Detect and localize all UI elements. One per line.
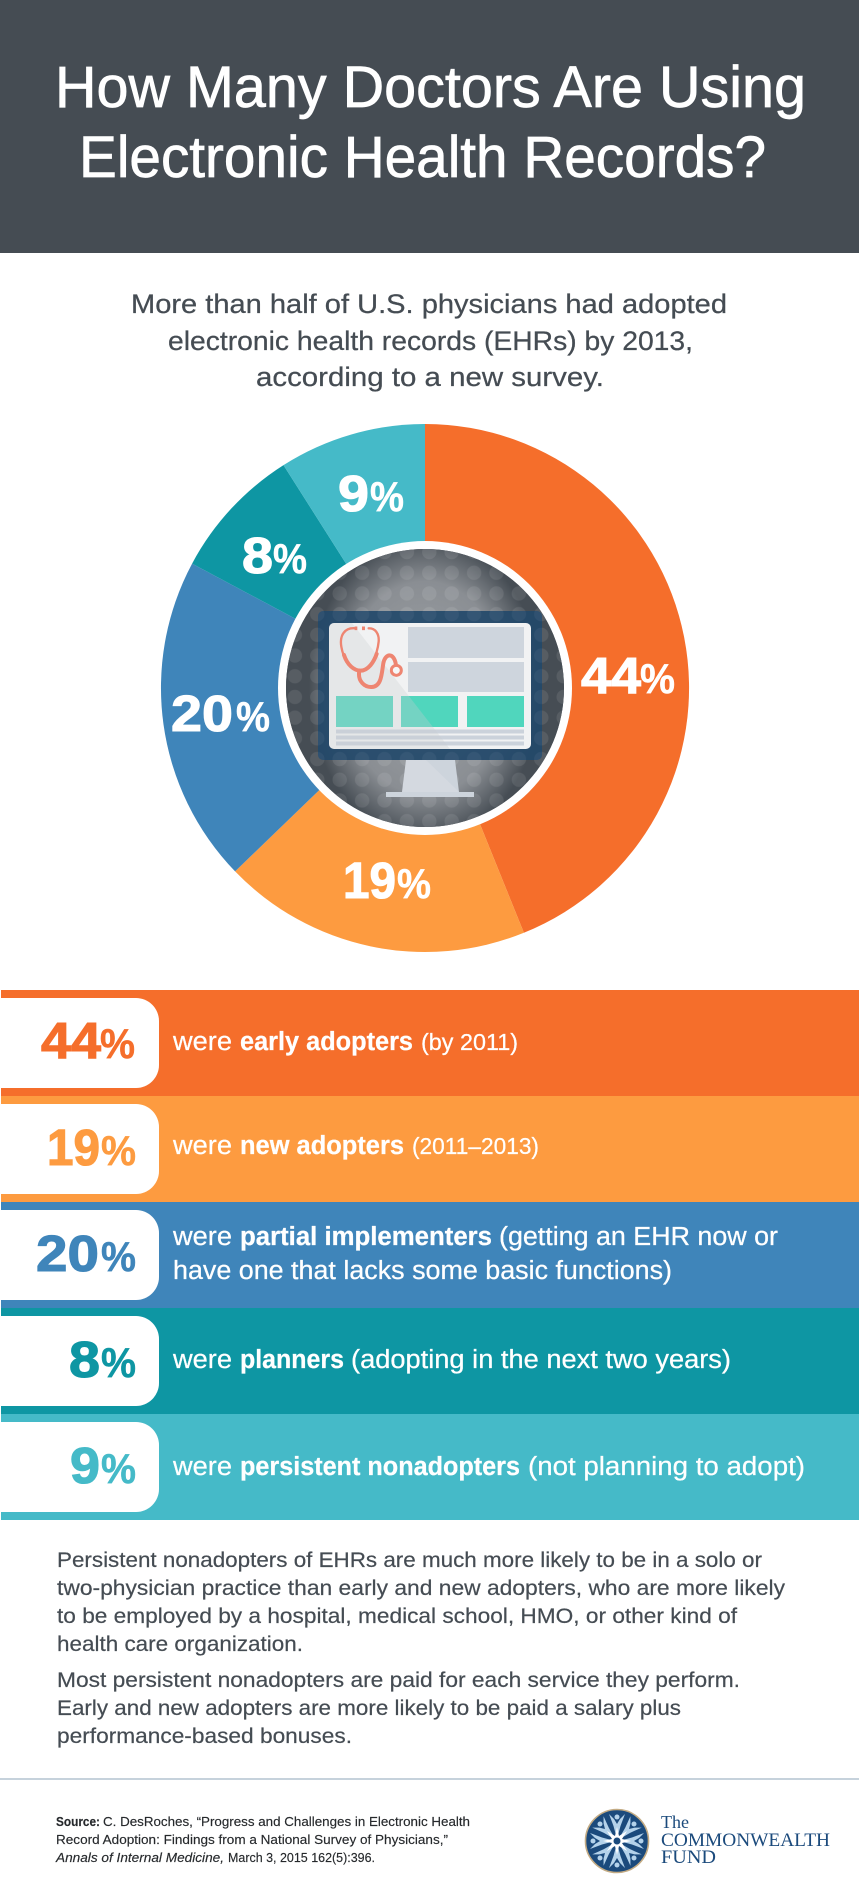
row: new adopters — [0, 1096, 859, 1202]
title — [55, 55, 806, 190]
text block: payment: Most persistent nonadopters are paid for each service they perform. — [57, 1668, 740, 1692]
row: new adopters: % — [101, 1127, 136, 1174]
slice: partial implementers 20% — [161, 564, 425, 871]
row: planners: 8 — [69, 1331, 100, 1388]
row: new adopters: were — [172, 1132, 232, 1160]
label 20% — [171, 685, 270, 742]
logo wordmark: COMMONWEALTH — [661, 1830, 830, 1851]
label 20%: % — [236, 693, 270, 740]
header banner — [0, 0, 859, 253]
row: persistent nonadopters: 9 — [70, 1437, 100, 1494]
row: partial implementers: partial implementers — [240, 1223, 492, 1251]
label 8% — [242, 527, 307, 584]
row: early adopters: % — [100, 1020, 135, 1067]
row: partial implementers: (getting an EHR now or — [499, 1223, 779, 1251]
subtitle: according to a new survey. — [256, 362, 604, 392]
subtitle — [131, 289, 727, 392]
text block: practice setting: to be employed by a hospital, medical school, HMO, or other kind of — [57, 1604, 737, 1628]
row: persistent nonadopters: persistent nonadopters — [240, 1453, 520, 1481]
text block: payment — [57, 1668, 740, 1748]
label 19% — [343, 852, 431, 909]
label 9%: % — [370, 473, 404, 520]
title: How Many Doctors Are Using — [55, 55, 806, 120]
icon: computer monitor with stethoscope — [278, 541, 572, 835]
row: persistent nonadopters: (not planning to adopt) — [528, 1453, 805, 1481]
label 44%: 44 — [581, 647, 642, 704]
title: Electronic Health Records? — [79, 125, 766, 190]
subtitle: electronic health records (EHRs) by 2013, — [168, 326, 693, 356]
source note: C. DesRoches, “Progress and Challenges in Electronic Health — [103, 1814, 470, 1829]
logo: The Commonwealth Fund — [586, 1810, 830, 1872]
row: early adopters: early adopters — [240, 1028, 413, 1056]
row: early adopters — [0, 990, 859, 1096]
source note: Source: — [56, 1814, 100, 1829]
row: persistent nonadopters — [0, 1414, 859, 1520]
text block: practice setting — [57, 1548, 785, 1656]
row: persistent nonadopters: % — [101, 1445, 136, 1492]
row: partial implementers: were — [172, 1223, 232, 1251]
slice: persistent nonadopters 9% — [284, 424, 425, 688]
row: planners — [0, 1308, 859, 1414]
label 8%: 8 — [242, 527, 273, 584]
slice: early adopters 44% — [425, 424, 689, 933]
subtitle: More than half of U.S. physicians had adopted — [131, 289, 727, 319]
text block: practice setting: Persistent nonadopters of EHRs are much more likely to be in a solo or — [57, 1548, 762, 1572]
row: new adopters: new adopters — [240, 1132, 404, 1160]
row: early adopters: (by 2011) — [421, 1029, 518, 1055]
source note: Record Adoption: Findings from a National Survey of Physicians,” — [56, 1832, 448, 1847]
row: planners: were — [172, 1346, 232, 1374]
panel: legend rows — [0, 990, 859, 1520]
label 44% — [581, 647, 675, 704]
slice: new adopters 19% — [235, 688, 524, 952]
logo wordmark — [661, 1812, 830, 1868]
label 8%: % — [273, 535, 307, 582]
row: partial implementers — [0, 1202, 859, 1308]
text block: practice setting: two-physician practice than early and new adopters, who are more likely — [57, 1576, 785, 1600]
logo wordmark: FUND — [661, 1847, 716, 1868]
row: planners: (adopting in the next two years) — [351, 1346, 731, 1374]
row: early adopters: were — [172, 1028, 232, 1056]
row: partial implementers: 20 — [36, 1225, 99, 1282]
label 9% — [338, 465, 404, 522]
label 19%: % — [397, 860, 431, 907]
slice: planners 8% — [192, 465, 425, 688]
row: planners: planners — [240, 1346, 344, 1374]
row: new adopters: 19 — [47, 1119, 100, 1176]
row: new adopters: (2011–2013) — [412, 1133, 539, 1159]
logo wordmark: The — [661, 1812, 689, 1832]
label 9%: 9 — [338, 465, 369, 522]
source note: March 3, 2015 162(5):396. — [228, 1850, 375, 1865]
row: partial implementers: % — [101, 1233, 136, 1280]
text block: payment: performance-based bonuses. — [57, 1724, 352, 1748]
donut chart — [161, 424, 689, 952]
row: early adopters: 44 — [41, 1012, 102, 1069]
text block: payment: Early and new adopters are more likely to be paid a salary plus — [57, 1696, 681, 1720]
text block: practice setting: health care organization. — [57, 1632, 303, 1656]
label 20%: 20 — [171, 685, 233, 742]
label 19%: 19 — [343, 852, 396, 909]
icon: star seal — [586, 1810, 648, 1872]
icon: stethoscope — [341, 628, 401, 687]
row: persistent nonadopters: were — [172, 1453, 232, 1481]
label 44%: % — [640, 655, 675, 702]
row: planners: % — [101, 1339, 136, 1386]
row: partial implementers: have one that lacks some basic functions) — [173, 1257, 672, 1285]
source note — [55, 1814, 470, 1865]
source note: Annals of Internal Medicine, — [55, 1850, 224, 1865]
